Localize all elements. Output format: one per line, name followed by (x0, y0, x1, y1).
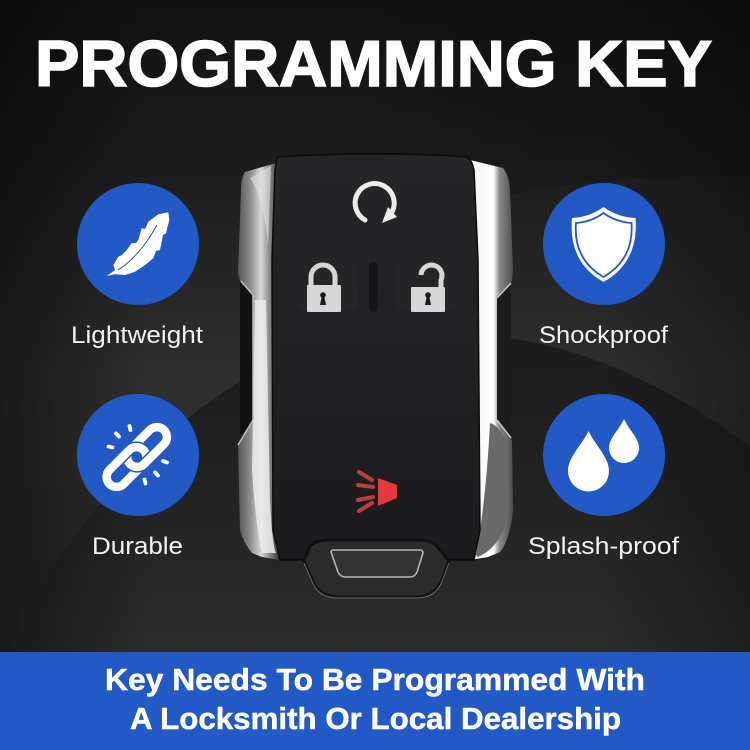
button divider (369, 262, 378, 312)
label: Splash-proof (528, 533, 679, 560)
icon: shield (543, 183, 665, 305)
banner text line one: Key Needs To Be Programmed With (105, 662, 645, 697)
feature: splash-proof (528, 394, 679, 560)
feature: lightweight (71, 183, 203, 349)
label: Shockproof (539, 322, 668, 349)
key fob: black rubber body (272, 154, 480, 560)
feature: durable (77, 394, 199, 560)
key fob: right chrome side (470, 160, 513, 560)
title: PROGRAMMING KEY (35, 27, 712, 100)
icon: feather (77, 183, 199, 305)
icon: water drops (543, 394, 665, 516)
banner text line two: A Locksmith Or Local Dealership (130, 701, 621, 736)
key fob: lower loop (304, 540, 449, 598)
icon: lock button (297, 258, 358, 312)
key fob: left chrome side (238, 163, 280, 560)
label: Lightweight (71, 322, 203, 349)
icon: red panic alarm button (358, 472, 397, 511)
label: Durable (92, 533, 183, 560)
icon: unlock button (396, 258, 457, 312)
icon: chain link (77, 394, 199, 516)
feature: shockproof (539, 183, 668, 349)
icon: remote start button (355, 184, 397, 223)
key fob photo (238, 154, 513, 598)
bottom banner (0, 652, 750, 750)
